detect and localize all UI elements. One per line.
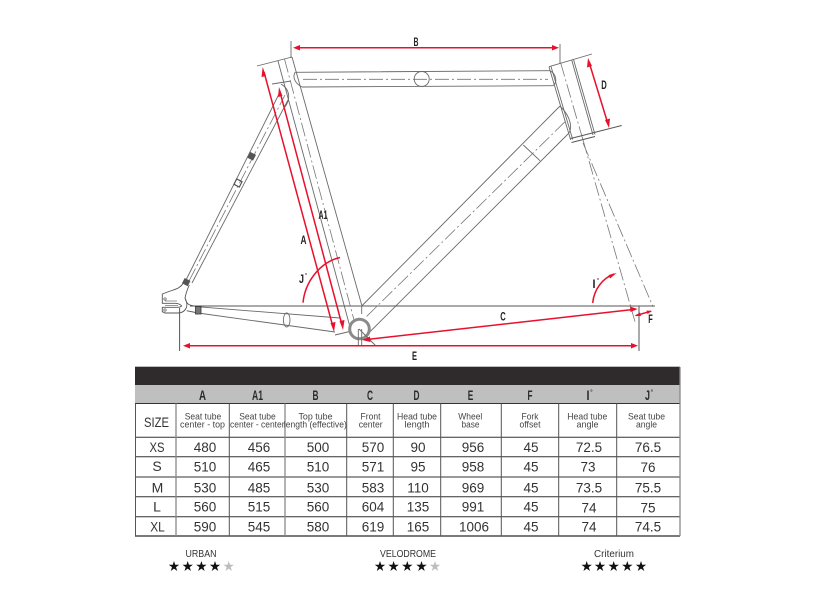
row M: 73.5 (576, 480, 602, 496)
top tube (294, 71, 556, 87)
row XL: 545 (248, 520, 270, 535)
column letter bar: ° (590, 390, 593, 396)
dimension A1 (278, 87, 344, 330)
row XS: 76.5 (635, 440, 661, 455)
column headers: Seat tube (239, 412, 276, 422)
table grid (135, 367, 680, 536)
rating: criterium: Criterium (594, 549, 634, 560)
rating: urban: URBAN (186, 549, 216, 560)
dimension B: B (414, 35, 419, 49)
row XS: 45 (523, 440, 539, 455)
row M: 110 (407, 480, 429, 496)
dimension A1: A1 (318, 208, 328, 222)
dimension A (262, 67, 336, 332)
column headers: Head tube (567, 412, 607, 422)
column letter bar: A (199, 387, 206, 403)
row M: 530 (194, 480, 216, 496)
column headers: angle (576, 420, 598, 430)
geometry table (135, 367, 680, 536)
column headers: length (404, 420, 430, 430)
column headers: Top tube (298, 412, 332, 422)
column headers: Wheel (458, 412, 482, 422)
bicycle frame drawing (162, 35, 655, 363)
column headers: Fork (522, 412, 539, 422)
angle I (592, 273, 617, 303)
column letter bar (135, 385, 680, 404)
dimension D: D (601, 78, 607, 92)
angle I: I (592, 277, 596, 291)
table title bar (135, 367, 680, 385)
row M: 485 (248, 480, 270, 496)
row L: 75 (640, 500, 656, 516)
dimension C (362, 306, 638, 342)
dimension A: A (300, 233, 307, 247)
row XS (150, 439, 661, 455)
row S: 510 (307, 460, 329, 474)
row L: 560 (194, 500, 216, 515)
column letter bar: B (312, 387, 318, 403)
dimension E (183, 343, 638, 363)
angle J (299, 258, 340, 303)
row XS: 500 (307, 440, 329, 455)
rating: urban (169, 549, 234, 571)
row XS: 480 (194, 440, 216, 455)
row XS: 90 (410, 440, 426, 455)
column letter bar: C (367, 387, 373, 403)
row S: 95 (410, 460, 426, 474)
column letter bar: J (645, 387, 650, 403)
column headers: offset (520, 420, 541, 430)
column headers: center - top (180, 420, 225, 430)
dimension F (634, 310, 653, 326)
column letter bar: E (468, 387, 473, 403)
fork centre lines (583, 140, 653, 322)
column headers: SIZE (144, 414, 169, 430)
row L: 515 (248, 500, 270, 515)
row M: M (152, 480, 163, 496)
seat tube (257, 41, 362, 335)
row L (153, 499, 656, 516)
column letter bar: A1 (252, 387, 263, 403)
row S: 45 (523, 460, 539, 474)
dimension D (587, 58, 610, 128)
dimension B (293, 35, 559, 50)
column headers: Front (360, 412, 381, 422)
column headers: angle (636, 420, 657, 430)
column headers: Seat tube (185, 412, 221, 422)
rating: criterium (581, 549, 646, 571)
column letter bar: ° (651, 390, 654, 396)
row L: 135 (407, 500, 429, 515)
row XL: 74.5 (635, 520, 661, 535)
row XL: XL (150, 519, 165, 535)
head tube (549, 44, 622, 142)
column headers: Head tube (397, 412, 437, 422)
row M: 583 (362, 480, 384, 496)
row S: 76 (640, 460, 656, 475)
row L: 604 (362, 500, 385, 515)
row M: 530 (307, 480, 329, 496)
angle J: ° (305, 273, 307, 279)
row XL: 619 (362, 520, 384, 535)
row L: 45 (523, 500, 539, 515)
chain stay (190, 306, 655, 335)
seat stay (186, 81, 291, 283)
row L: 991 (462, 500, 484, 515)
extension lines (180, 306, 639, 351)
angle I: ° (597, 278, 599, 284)
row L: 74 (581, 500, 597, 516)
row S: 571 (362, 460, 384, 474)
column headers: length (effective) (284, 420, 347, 430)
column headers (144, 412, 665, 430)
dimension C: C (500, 310, 506, 324)
row M: 75.5 (635, 480, 661, 496)
row XS: 570 (362, 440, 384, 455)
row XL: 1006 (459, 520, 489, 535)
column letter bar: I (586, 387, 590, 403)
row XS: 72.5 (576, 440, 602, 455)
row S: 465 (248, 460, 270, 474)
row L: 560 (307, 500, 329, 515)
dimension F: F (648, 312, 653, 326)
row XL (150, 519, 661, 535)
row L: L (153, 499, 161, 515)
dimension E: E (412, 349, 417, 363)
row S (152, 458, 656, 475)
row S: 73 (580, 460, 596, 474)
rating: velodrome: VELODROME (380, 549, 436, 560)
rating: velodrome (375, 549, 440, 571)
bottom bracket (350, 306, 376, 346)
column letter bar: D (414, 387, 420, 403)
column headers: center - center (230, 420, 285, 430)
row XS: 456 (248, 440, 270, 455)
row XS: XS (150, 439, 164, 455)
row XL: 74 (581, 520, 597, 535)
row XL: 580 (307, 520, 329, 535)
column headers: center (359, 420, 383, 430)
row XS: 956 (462, 440, 484, 455)
row S: 510 (194, 460, 216, 474)
row S: 958 (462, 460, 484, 474)
row M (152, 480, 661, 496)
row M: 45 (523, 480, 539, 496)
row XL: 590 (194, 520, 216, 535)
row S: S (152, 458, 162, 474)
row XL: 45 (523, 520, 539, 535)
column headers: Seat tube (628, 412, 665, 422)
angle J: J (299, 272, 304, 286)
column headers: base (462, 420, 480, 430)
row M: 969 (462, 480, 484, 496)
rear dropout (162, 278, 201, 314)
row XL: 165 (407, 520, 429, 535)
down tube (362, 106, 571, 335)
column letter bar: F (528, 387, 533, 403)
